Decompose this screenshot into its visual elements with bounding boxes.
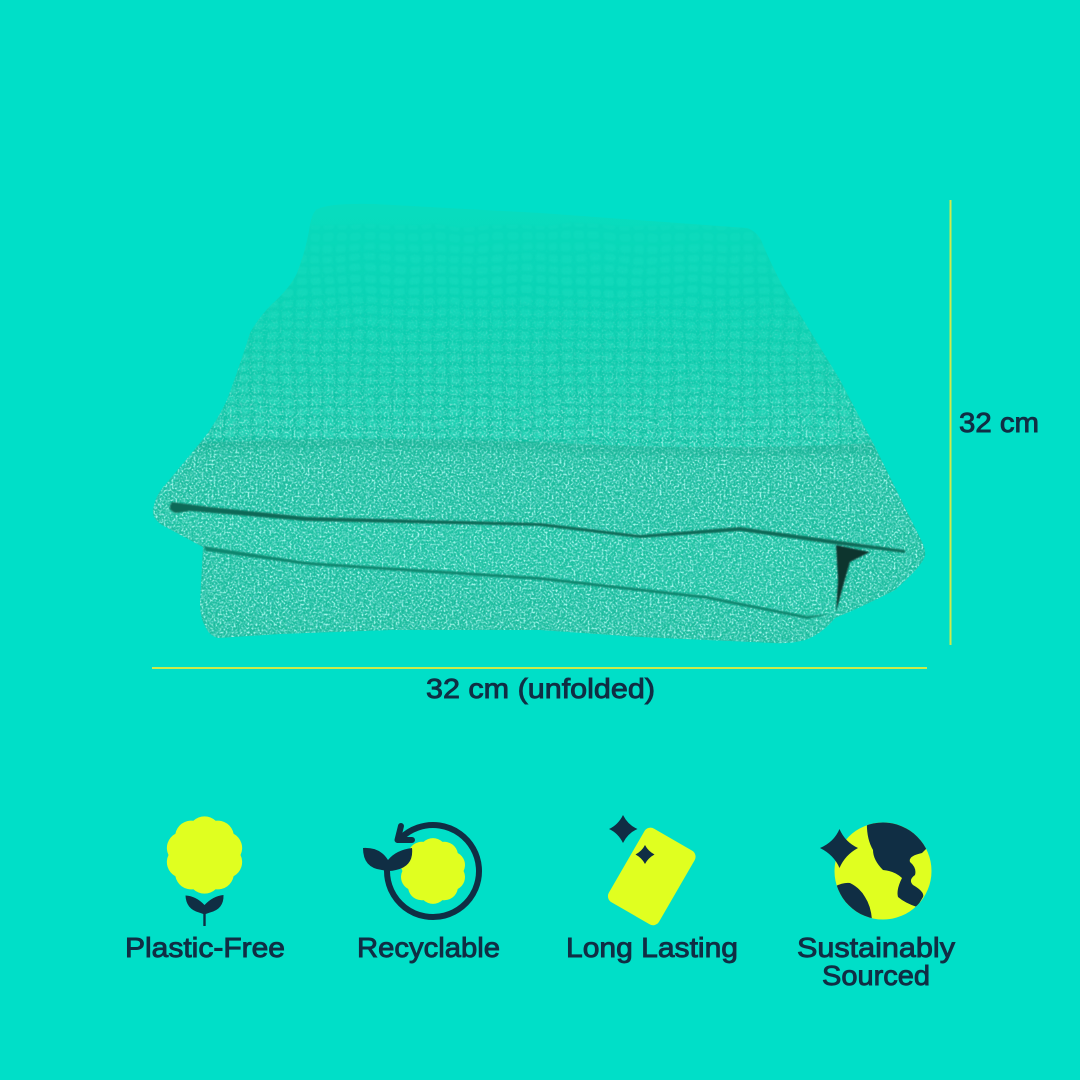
- label: sustainably sourced: [797, 932, 955, 991]
- icon: sponge with sparkles: [605, 815, 698, 928]
- lower crease: [203, 546, 830, 619]
- inner fold shadow: [836, 545, 870, 612]
- width label: 32 cm (unfolded): [426, 673, 655, 704]
- width dimension line: [152, 667, 927, 669]
- towel body: [140, 195, 940, 655]
- height dimension line: [950, 200, 952, 645]
- feature: sustainably sourced: [797, 820, 955, 991]
- label: sustainably sourced: Sustainably: [797, 932, 955, 963]
- fold band top shade: [195, 439, 877, 456]
- label: long lasting: Long Lasting: [566, 932, 738, 963]
- label: recyclable: Recyclable: [357, 932, 500, 963]
- feature: recyclable: [357, 825, 500, 963]
- feature: long lasting: [566, 815, 738, 963]
- middle layer: [153, 507, 837, 617]
- label: sustainably sourced: Sourced: [822, 960, 930, 991]
- waffle weave texture: [188, 326, 870, 458]
- icon: flower with leaves: [167, 816, 242, 926]
- feature: plastic-free: [125, 816, 285, 963]
- front fold band: [150, 439, 930, 552]
- icon: globe with sparkle: [820, 822, 932, 920]
- towel photo illustration: [130, 195, 950, 655]
- icon: recycling circle with flower and leaves: [363, 825, 479, 917]
- height label: 32 cm: [959, 407, 1039, 438]
- fabric speckle dark: [153, 334, 924, 643]
- upper crease: [170, 502, 905, 553]
- label: plastic-free: Plastic-Free: [125, 932, 285, 963]
- fabric speckle light: [153, 296, 925, 644]
